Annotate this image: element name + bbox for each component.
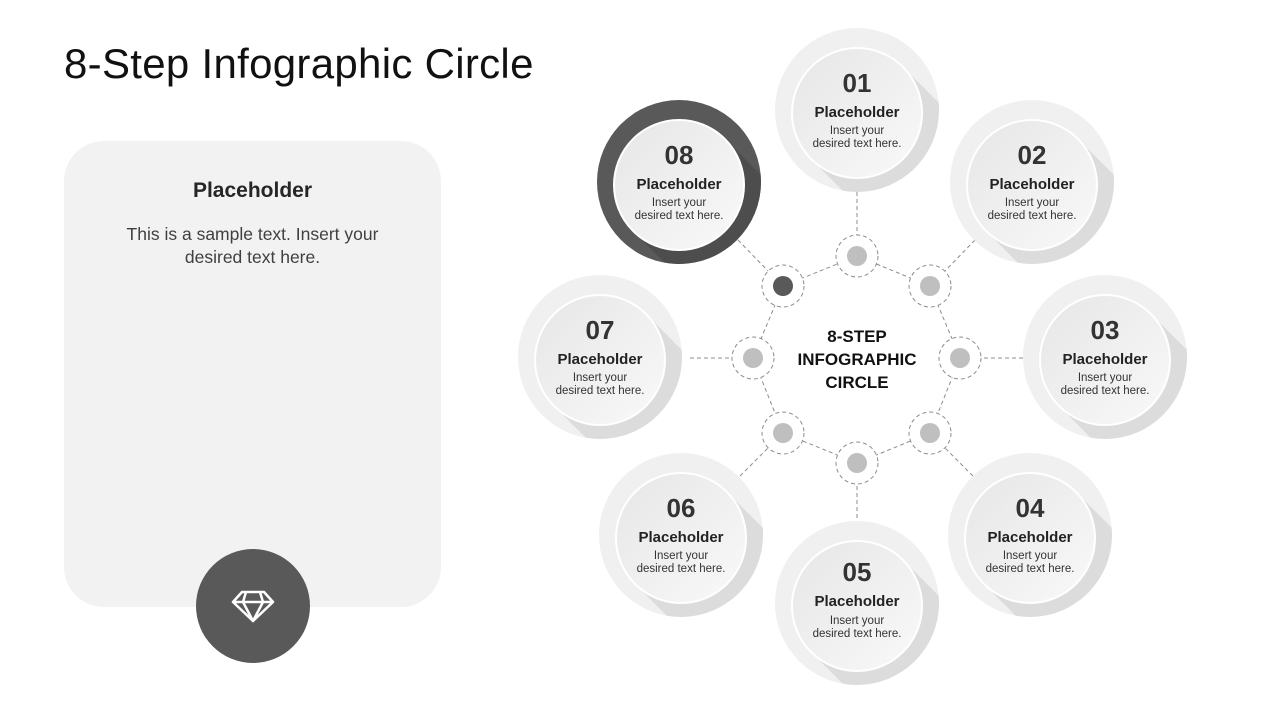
- step 07: [518, 275, 682, 439]
- step 05: Insert your: [830, 615, 884, 627]
- step 06: desired text here.: [637, 563, 725, 575]
- step 04: Placeholder: [987, 529, 1073, 546]
- step 07: Placeholder: [557, 351, 643, 368]
- panel body text: This is a sample text. Insert your: [127, 224, 378, 244]
- step 03: Insert your: [1078, 372, 1132, 384]
- step 05: Placeholder: [814, 593, 900, 610]
- step 07: Insert your: [573, 372, 627, 384]
- panel body text: [126, 224, 378, 267]
- center title: INFOGRAPHIC: [798, 350, 916, 369]
- step 04: [948, 453, 1112, 617]
- step 06: [599, 453, 763, 617]
- step 01: desired text here.: [813, 138, 901, 150]
- step 07: desired text here.: [556, 385, 644, 397]
- step 01: 01: [843, 68, 871, 98]
- step 08 (highlighted): desired text here.: [635, 210, 723, 222]
- step 05: desired text here.: [813, 628, 901, 640]
- center title: 8-STEP: [827, 327, 887, 346]
- panel: text: [64, 141, 441, 607]
- step 05: [775, 521, 939, 685]
- nodes: [732, 235, 981, 484]
- step 01: [775, 28, 939, 192]
- step 03: [1023, 275, 1187, 439]
- step 05: 05: [843, 557, 871, 587]
- step 02: [950, 100, 1114, 264]
- step 01: Placeholder: [814, 104, 900, 121]
- step 03: desired text here.: [1061, 385, 1149, 397]
- step 08 (highlighted): 08: [665, 140, 693, 170]
- panel heading: Placeholder: [193, 179, 312, 202]
- step 08 (highlighted): Placeholder: [636, 176, 722, 193]
- step 08 (highlighted): Insert your: [652, 197, 706, 209]
- step 04: Insert your: [1003, 550, 1057, 562]
- step 07: 07: [586, 315, 614, 345]
- step 06: Insert your: [654, 550, 708, 562]
- step 08 (highlighted): [597, 100, 761, 264]
- center title: CIRCLE: [825, 373, 889, 392]
- step 02: Insert your: [1005, 197, 1059, 209]
- icon: diamond: [196, 549, 310, 663]
- step 04: 04: [1016, 493, 1045, 523]
- step 01: Insert your: [830, 125, 884, 137]
- step 02: 02: [1018, 140, 1046, 170]
- step 02: desired text here.: [988, 210, 1076, 222]
- title: 8-Step Infographic Circle: [64, 40, 534, 87]
- step 03: Placeholder: [1062, 351, 1148, 368]
- center title: [798, 327, 916, 392]
- step 02: Placeholder: [989, 176, 1075, 193]
- connectors: [690, 192, 1023, 525]
- step 04: desired text here.: [986, 563, 1074, 575]
- step 03: 03: [1091, 315, 1119, 345]
- panel body text: desired text here.: [185, 247, 320, 267]
- step 06: Placeholder: [638, 529, 724, 546]
- step 06: 06: [667, 493, 695, 523]
